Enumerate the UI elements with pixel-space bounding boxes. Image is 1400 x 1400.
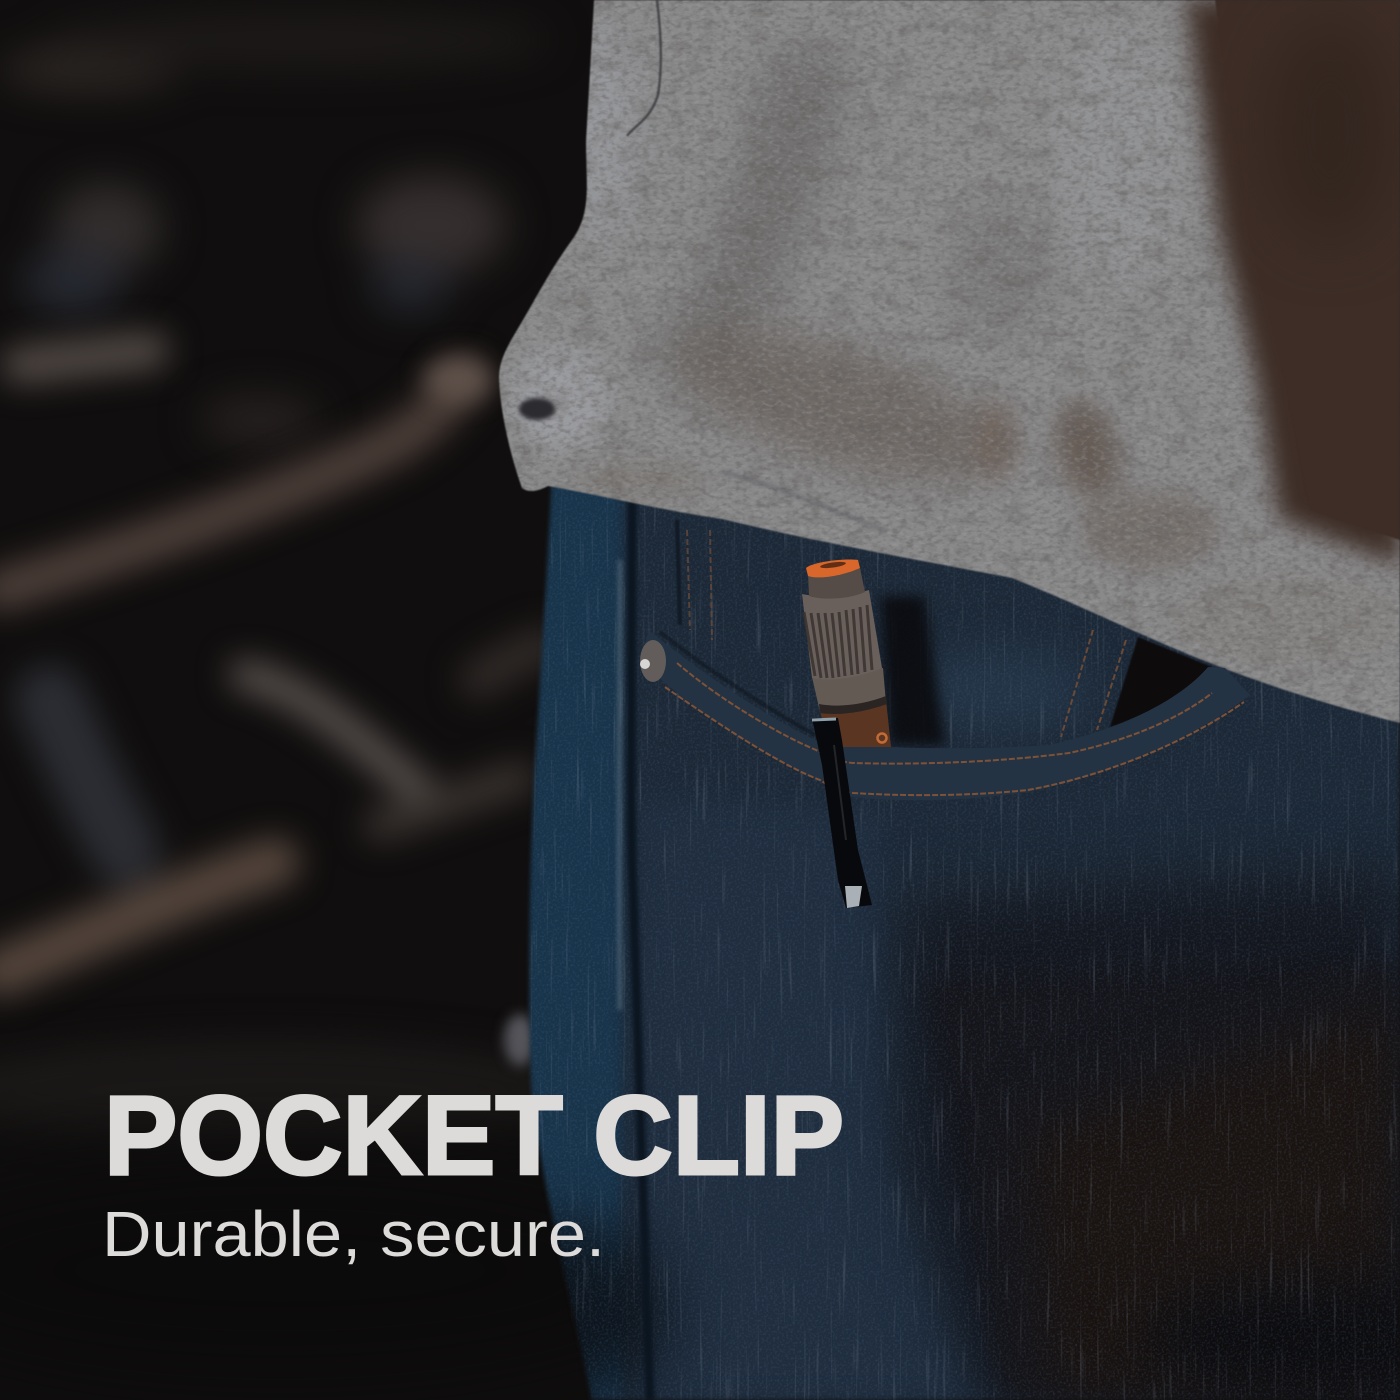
pocket stitch lower	[665, 687, 1244, 795]
side seam	[631, 500, 650, 1400]
flashlight knurled grip	[802, 590, 882, 680]
flashlight bezel	[812, 668, 886, 714]
pocket edge shadow	[660, 632, 815, 735]
flashlight head	[808, 568, 865, 599]
flashlight orange tip	[806, 559, 860, 577]
panel: gray t-shirt	[480, 0, 1400, 740]
icon: rivet	[640, 640, 666, 682]
icon: pocket clip	[812, 718, 872, 908]
flashlight logo mark	[878, 734, 886, 742]
shirt hem crease	[722, 472, 885, 530]
pocket shadow	[880, 596, 945, 745]
panel: jeans pocket	[640, 596, 1250, 800]
flashlight lower body	[820, 700, 891, 747]
title: Pocket Clip: POCKET CLIP	[104, 1073, 844, 1198]
panel: flashlight in pocket	[802, 559, 891, 747]
pocket band	[640, 630, 1250, 800]
waistband stitching	[687, 530, 712, 640]
pocket stitch upper	[677, 663, 1212, 764]
panel: denim jeans	[526, 486, 1400, 1400]
subtitle: Durable, secure.: Durable, secure.	[102, 1198, 605, 1270]
shirt body shadow	[1186, 0, 1400, 566]
shirt stains and folds	[510, 20, 1400, 665]
belt loop stitching	[1061, 630, 1126, 737]
pocket interior	[1110, 637, 1212, 727]
jeans shading	[450, 480, 1400, 1400]
